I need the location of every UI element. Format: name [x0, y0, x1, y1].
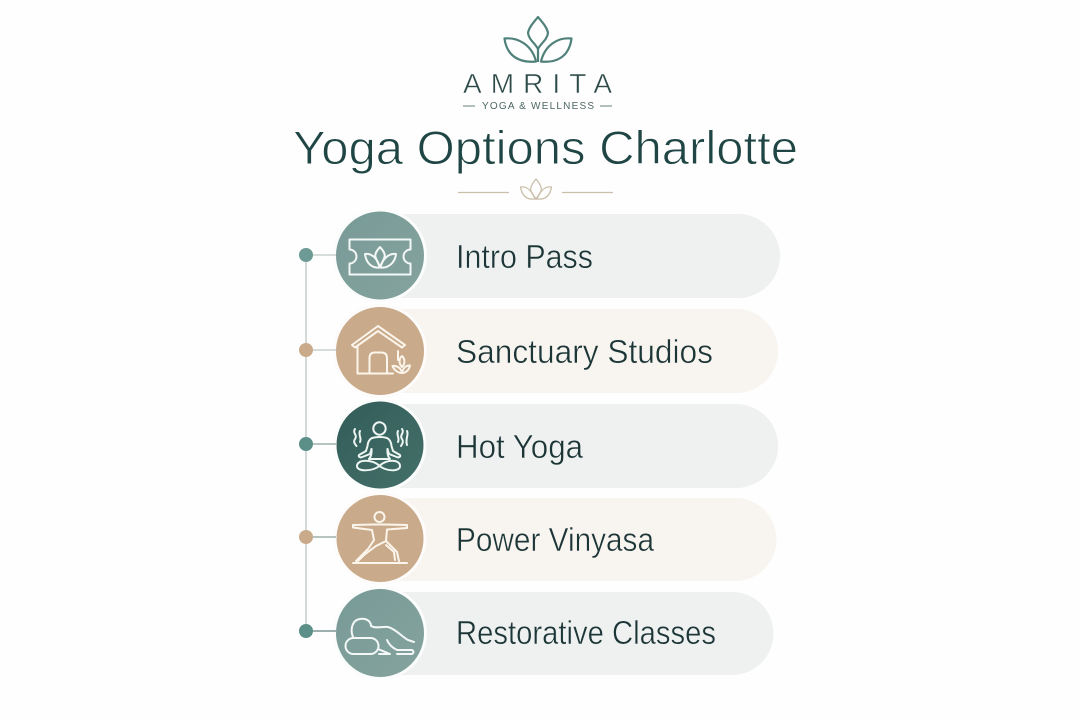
timeline dot	[299, 343, 313, 357]
logo: Amrita Yoga & Wellness	[463, 17, 612, 112]
circle badge	[334, 492, 426, 585]
timeline dot	[299, 530, 313, 544]
circle badge	[333, 304, 427, 398]
circle badge	[333, 586, 427, 680]
logo tagline: YOGA & WELLNESS	[482, 101, 594, 112]
pill	[400, 309, 778, 393]
timeline connector	[306, 255, 336, 631]
row: Intro Pass	[299, 208, 780, 302]
icon: ticket with lotus	[350, 240, 410, 274]
timeline dot	[299, 248, 313, 262]
label: Intro Pass	[456, 238, 593, 275]
circle badge	[333, 208, 427, 302]
divider with lotus	[458, 179, 613, 199]
pill	[400, 498, 776, 581]
row: Sanctuary Studios	[299, 304, 778, 398]
icon: warrior pose figure	[353, 512, 407, 563]
timeline dot	[299, 437, 313, 451]
pill	[400, 592, 774, 675]
row: Restorative Classes	[299, 586, 774, 680]
label: Hot Yoga	[456, 428, 584, 465]
title: Yoga Options Charlotte	[293, 121, 798, 174]
label: Restorative Classes	[456, 614, 716, 651]
pill	[400, 404, 778, 488]
timeline dot	[299, 624, 313, 638]
row: Hot Yoga	[299, 398, 778, 492]
icon: reclining figure on bolster	[346, 619, 414, 654]
icon: house with plant	[352, 326, 410, 374]
circle badge	[334, 398, 426, 492]
label: Power Vinyasa	[456, 521, 655, 558]
icon: small lotus	[520, 179, 552, 199]
icon: logo lotus	[504, 17, 572, 62]
row: Power Vinyasa	[299, 492, 776, 585]
icon: meditating figure with heat waves	[354, 422, 408, 470]
logo wordmark: AMRITA	[463, 68, 612, 99]
pill	[400, 214, 780, 298]
label: Sanctuary Studios	[456, 333, 713, 370]
